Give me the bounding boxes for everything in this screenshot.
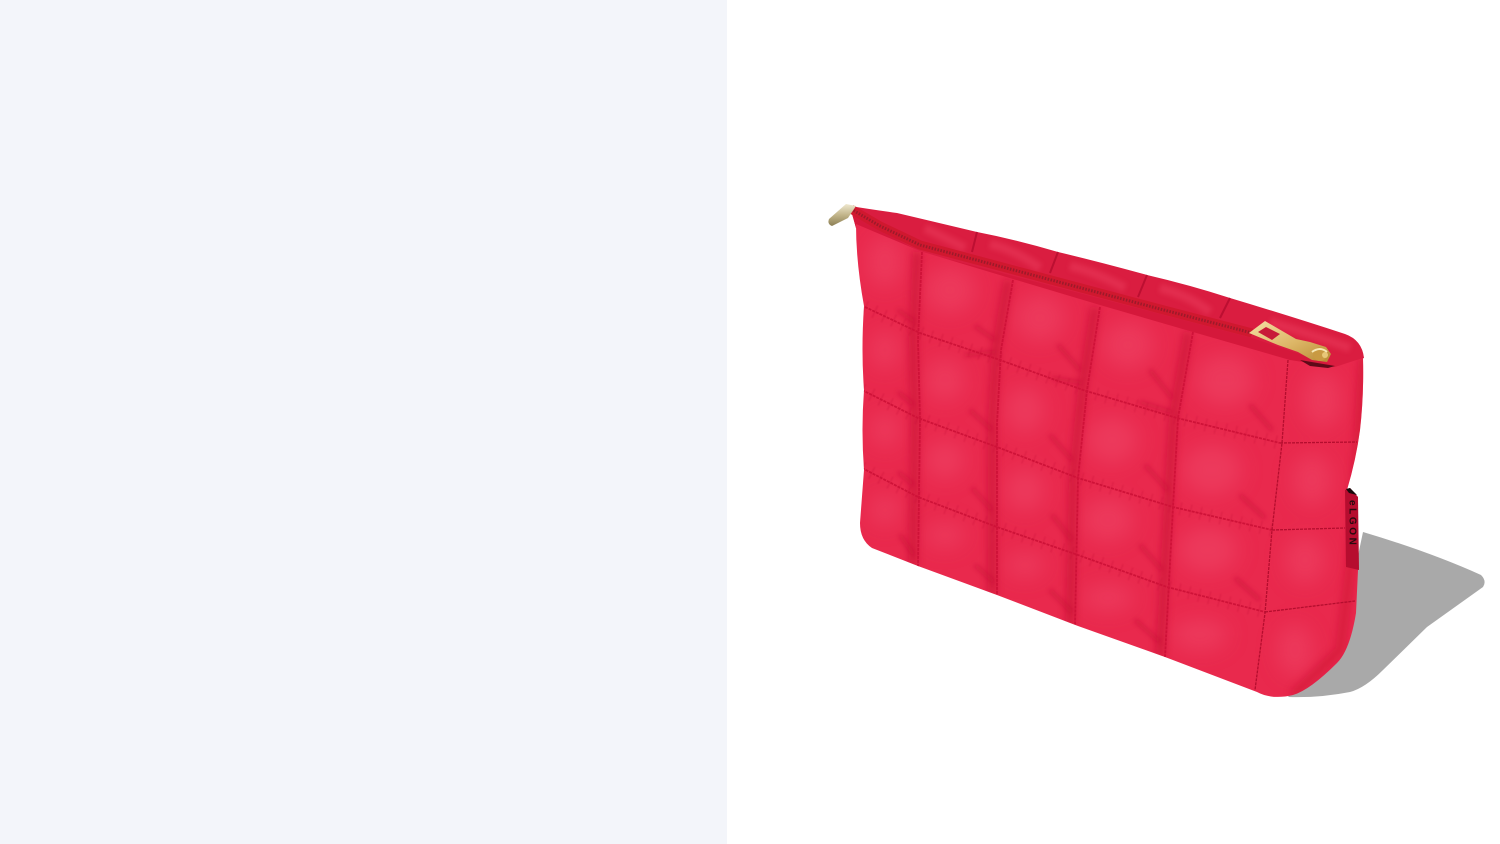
product illustration — [828, 204, 1485, 698]
soft highlights — [867, 236, 1342, 676]
side label tab with brand name — [1345, 488, 1359, 570]
side label tab with brand name: eLGON — [1346, 500, 1358, 547]
icon: metal zipper end stop — [828, 204, 856, 226]
quilted pouch body — [856, 224, 1363, 697]
cast shadow — [1288, 532, 1485, 697]
stitched seams — [862, 252, 1280, 657]
shading beside vertical seams — [913, 252, 1188, 657]
zipper tape — [852, 214, 1335, 366]
creases radiating from seams — [898, 310, 1272, 642]
icon: gold zipper pull — [1249, 321, 1335, 368]
seam wrinkles — [864, 308, 1276, 580]
back flap of the pouch — [850, 206, 1364, 369]
edge shading — [1293, 358, 1363, 695]
panel: pale blue left panel — [0, 0, 727, 844]
zipper — [851, 209, 1252, 333]
